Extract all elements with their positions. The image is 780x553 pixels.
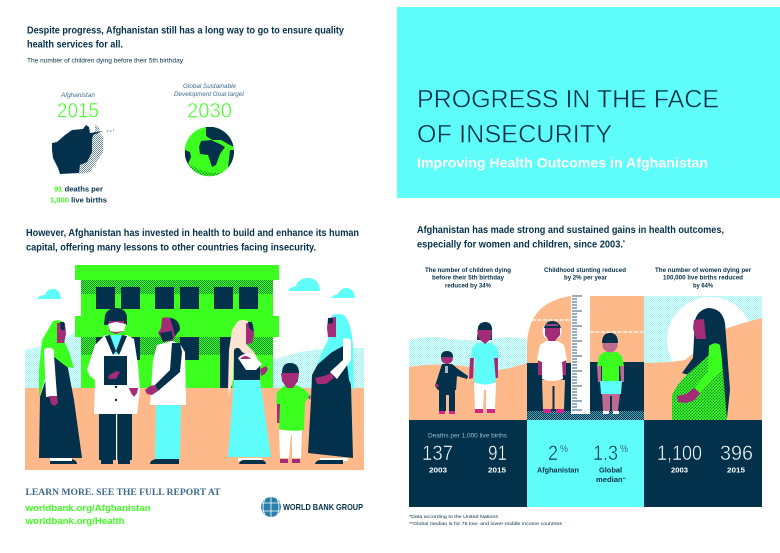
- footnotes: [409, 514, 563, 527]
- caption: child deaths: [425, 267, 511, 290]
- girl: [469, 322, 499, 413]
- child: short boy: [597, 333, 624, 414]
- heading: long way to go: health services for all.: [27, 39, 123, 51]
- statement: invested in health: capital, offering many lessons to other countries facing insecurity.: [26, 241, 316, 253]
- stat: Afghanistan 2015: Afghanistan: [60, 93, 96, 99]
- stats: stunting: median: [596, 477, 621, 484]
- stat text: 91 deaths: 1,000 live births: [50, 196, 107, 205]
- subtitle: Improving Health Outcomes in Afghanistan: [417, 155, 708, 171]
- panel: children illustration: [409, 322, 527, 420]
- links: worldbank.org/Health: [24, 516, 125, 527]
- subheading: children dying: The number of children dying before their 5th birthday: [27, 59, 183, 65]
- caption: child deaths: before their 5th birthday: [432, 275, 504, 282]
- stats: maternal deaths: 1,100: [657, 442, 702, 465]
- mother: [672, 308, 730, 420]
- child: tall boy: [537, 321, 567, 413]
- stat text: 91 deaths: 91 deaths per: [54, 185, 103, 194]
- stats: stunting: Afghanistan: [537, 468, 579, 475]
- icon: globe: [185, 127, 236, 180]
- statement: invested in health: However, Afghanistan has invested in health to build and enhance its human: [26, 227, 359, 239]
- panel: stunting illustration: [527, 296, 644, 420]
- heading: long way to go: [27, 24, 344, 51]
- stats: child deaths: [409, 420, 527, 507]
- caption: child deaths: The number of children dying: [425, 267, 511, 274]
- ruler: [571, 296, 590, 414]
- stats: stunting: Global: [599, 468, 622, 475]
- icon: Afghanistan map: [52, 125, 114, 174]
- caption: stunting: [544, 267, 626, 282]
- clinic building: [75, 265, 279, 388]
- person: pregnant woman in cyan scarf: [308, 314, 354, 464]
- caption: stunting: by 2% per year: [564, 275, 607, 282]
- footnotes: *Data according to the United Nations: [409, 514, 499, 520]
- panel: mother illustration: [644, 296, 762, 420]
- caption: child deaths: reduced by 34%: [445, 283, 491, 290]
- stats: stunting: 1.3: [593, 442, 618, 465]
- heading: sustained gains: *: [623, 240, 626, 246]
- stats: maternal deaths: [644, 420, 762, 507]
- statement: invested in health: [26, 227, 359, 253]
- stats: maternal deaths: 2015: [727, 468, 745, 475]
- person: mother with baby: [228, 320, 271, 464]
- caption: stunting: Childhood stunting reduced: [544, 267, 626, 274]
- person: child in green: [276, 363, 311, 463]
- title: OF INSECURITY: [417, 121, 612, 149]
- person: woman in green scarf: [39, 320, 82, 464]
- heading: sustained gains: [417, 224, 724, 250]
- stats: stunting: **: [623, 476, 626, 481]
- title: [417, 85, 719, 149]
- panel: title: [397, 7, 780, 198]
- stat: global target 2030: Development Goal target: [174, 92, 244, 98]
- title: PROGRESS IN THE FACE: [417, 85, 719, 113]
- logo: World Bank Group: [261, 497, 363, 517]
- illustration: clinic and people: [25, 265, 364, 470]
- stats: child deaths: 2015: [488, 468, 506, 475]
- stats: stunting: %: [560, 444, 568, 455]
- stats: maternal deaths: 2003: [671, 468, 688, 475]
- stat: global target 2030: [174, 84, 244, 122]
- stats: stunting: %: [620, 444, 628, 455]
- links: [24, 503, 151, 527]
- stats: maternal deaths: 396: [720, 442, 753, 465]
- stats: child deaths: 2003: [429, 468, 447, 475]
- boy: [435, 351, 468, 414]
- ground: [25, 388, 364, 470]
- caption: maternal deaths: 100,000 live births reduced: [663, 275, 743, 282]
- links: worldbank.org/Afghanistan: [24, 503, 151, 514]
- person: doctor: [87, 308, 140, 464]
- caption: maternal deaths: [655, 267, 751, 290]
- heading: long way to go: Despite progress, Afghanistan still has a long way to go to ensure quality: [27, 24, 344, 36]
- clouds: [37, 278, 355, 299]
- heading: sustained gains: especially for women and children, since 2003.: [417, 238, 650, 250]
- dashed height lines: [532, 320, 644, 332]
- stats: child deaths: Deaths per 1,000 live births: [428, 433, 507, 440]
- stats: stunting: [527, 420, 644, 507]
- person: man with beard: [145, 317, 186, 464]
- call to action: learn more: LEARN MORE. SEE THE FULL REPORT AT: [26, 488, 221, 498]
- stat: global target 2030: 2030: [187, 99, 232, 122]
- stats: stunting: 2: [548, 442, 558, 465]
- caption: maternal deaths: by 64%: [693, 283, 713, 290]
- stat: Afghanistan 2015: 2015: [57, 99, 99, 122]
- logo: World Bank Group: WORLD BANK GROUP: [283, 503, 363, 512]
- stat text: 91 deaths: [50, 185, 107, 205]
- stats: child deaths: 137: [422, 442, 453, 465]
- footnotes: **Global median is for 75 low- and lower-middle income countries: [409, 521, 563, 527]
- caption: maternal deaths: The number of women dying per: [655, 267, 751, 274]
- stats: child deaths: 91: [488, 442, 507, 465]
- stat: global target 2030: Global Sustainable: [183, 84, 237, 90]
- heading: sustained gains: Afghanistan has made strong and sustained gains in health outcomes,: [417, 224, 724, 236]
- dotted background hills: [25, 332, 364, 388]
